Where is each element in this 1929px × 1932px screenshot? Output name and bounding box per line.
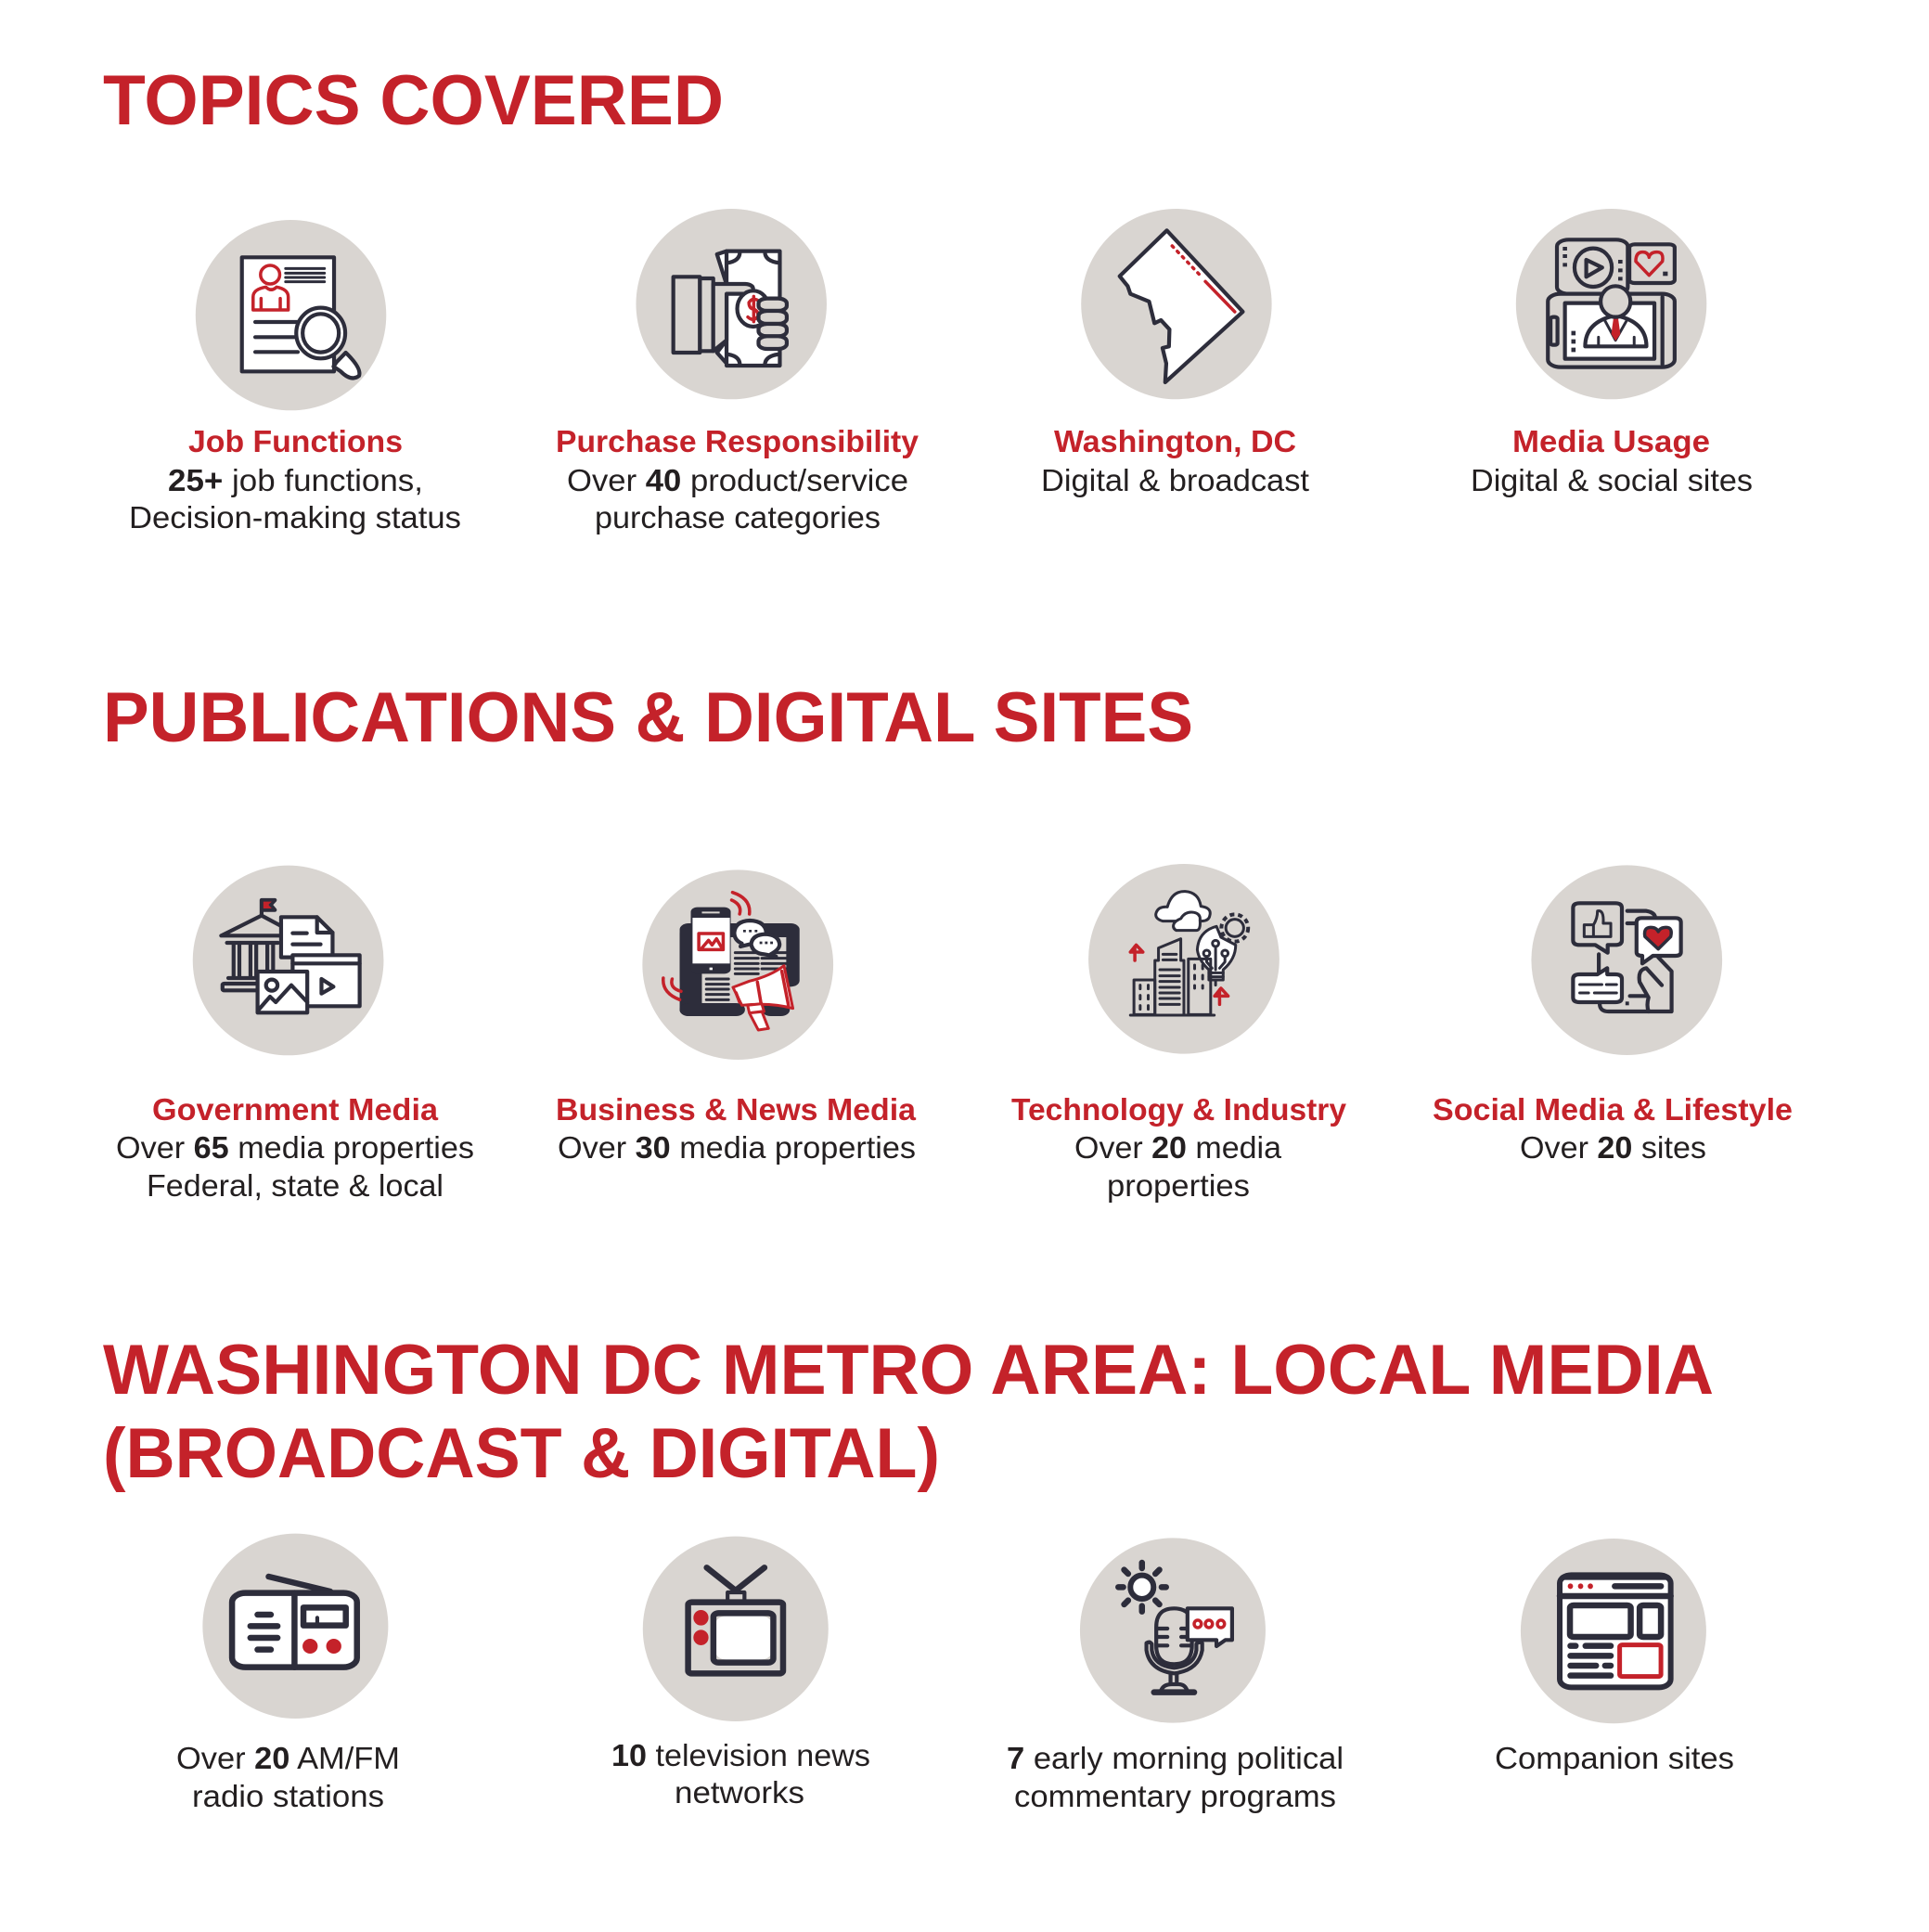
text: technology detail 1: Over 20 media	[1074, 1130, 1282, 1165]
icon: television	[643, 1537, 829, 1721]
text: job functions detail 1: 25+ job functions,	[168, 463, 423, 497]
text: digital and broadcast: Digital & broadcast	[1041, 463, 1309, 497]
text: social detail: Over 20 sites	[1520, 1130, 1706, 1165]
panel: business and news media	[556, 869, 917, 1165]
heading: topics covered: TOPICS COVERED	[103, 61, 724, 140]
label: purchase responsibility: Purchase Responsibility	[556, 424, 919, 458]
label: government media: Government Media	[152, 1092, 439, 1127]
icon: social bubbles and hand	[1531, 865, 1722, 1055]
panel: purchase responsibility	[556, 209, 919, 535]
icon: devices with presenter	[1516, 209, 1706, 399]
panel: government media	[116, 866, 474, 1203]
heading: publications and digital sites: PUBLICATIONS & DIGITAL SITES	[103, 678, 1193, 757]
text: technology detail 2: properties	[1107, 1168, 1250, 1203]
text: purchase detail 2: purchase categories	[595, 500, 881, 535]
icon: capitol building and documents	[193, 866, 383, 1055]
text: government detail 2: Federal, state & local	[147, 1168, 444, 1203]
text: business detail: Over 30 media properties	[558, 1130, 916, 1165]
panel: social media and lifestyle	[1433, 865, 1793, 1165]
panel: television news networks	[611, 1537, 870, 1810]
icon: web page	[1521, 1539, 1706, 1723]
label: media usage: Media Usage	[1512, 424, 1710, 458]
text: digital and social sites: Digital & social sites	[1471, 463, 1753, 497]
text: morning programs detail 2: commentary programs	[1014, 1779, 1336, 1813]
panel: technology and industry	[1011, 864, 1347, 1203]
text: television detail 2: networks	[675, 1775, 804, 1810]
text: radio detail 2: radio stations	[192, 1779, 384, 1813]
heading: washington dc metro area: WASHINGTON DC METRO AREA: LOCAL MEDIA	[103, 1331, 1714, 1410]
label: technology and industry: Technology & Industry	[1011, 1092, 1347, 1127]
label: job functions: Job Functions	[188, 424, 403, 458]
text: television detail 1: 10 television news	[611, 1738, 870, 1772]
text: purchase detail 1: Over 40 product/service	[567, 463, 908, 497]
panel: washington dc	[1041, 209, 1309, 497]
icon: radio	[202, 1534, 388, 1719]
panel: job functions	[129, 220, 461, 535]
panel: companion sites	[1495, 1539, 1734, 1775]
text: job functions detail 2: Decision-making status	[129, 500, 461, 535]
icon: resume with magnifier	[196, 220, 386, 410]
panel: media usage	[1471, 209, 1753, 497]
icon: hand holding money	[636, 209, 827, 399]
label: washington dc: Washington, DC	[1054, 424, 1296, 458]
icon: city cloud and lightbulb	[1088, 864, 1280, 1054]
text: morning programs detail 1: 7 early morning political	[1007, 1741, 1344, 1775]
text: radio detail 1: Over 20 AM/FM	[176, 1741, 400, 1775]
text: government detail 1: Over 65 media properties	[116, 1130, 474, 1165]
panel: morning political programs	[1007, 1538, 1344, 1813]
icon: dc map	[1081, 209, 1272, 399]
icon: tablet phone megaphone	[642, 869, 833, 1060]
icon: sun and microphone	[1080, 1538, 1266, 1723]
panel: radio stations	[176, 1534, 400, 1813]
label: business and news media: Business & News Media	[556, 1092, 917, 1127]
text: companion sites: Companion sites	[1495, 1741, 1734, 1775]
heading: broadcast and digital: (BROADCAST & DIGITAL)	[103, 1414, 940, 1493]
label: social media and lifestyle: Social Media & Lifestyle	[1433, 1092, 1793, 1127]
